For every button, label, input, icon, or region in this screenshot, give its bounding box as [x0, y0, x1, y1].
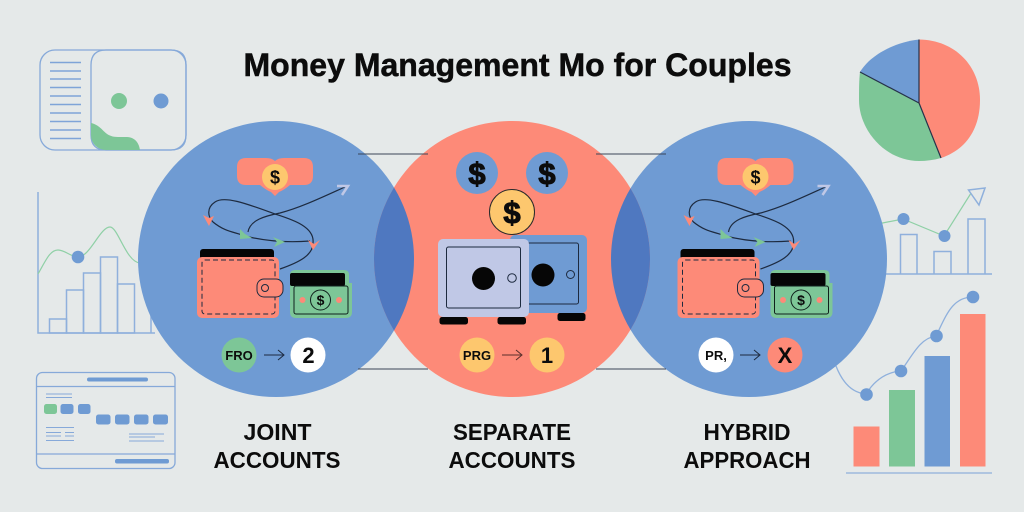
- flow: PR, to X: [698, 338, 802, 372]
- flow: FRO to 2: FRO: [225, 348, 253, 363]
- icon: wallet: [678, 249, 764, 318]
- label: hybrid approach: [684, 419, 810, 473]
- icon: back safe: [510, 235, 587, 321]
- flow: FRO to 2: 2: [302, 343, 315, 368]
- flow: PRG to 1: PRG: [463, 348, 491, 363]
- panel: joint accounts illustration: [197, 158, 352, 372]
- flow: PR, to X: PR,: [705, 348, 727, 363]
- panel: dashboard wireframe: [36, 372, 175, 468]
- connector lines: [358, 154, 666, 369]
- panel: document card illustration: [40, 50, 186, 150]
- icon: gold coin: $: [503, 195, 521, 230]
- label: joint accounts: [214, 419, 340, 473]
- panel: separate accounts illustration: [438, 152, 587, 372]
- circle: joint accounts: [138, 121, 414, 397]
- icon: cash: [290, 270, 352, 318]
- icon: looping arrows: [684, 186, 828, 269]
- icon: blue coin left: [456, 152, 498, 194]
- circle: hybrid approach: [611, 121, 887, 397]
- icon: heart badge with coin: $: [270, 168, 280, 188]
- label: separate accounts: ACCOUNTS: [448, 447, 576, 473]
- chart: right upper line and bars: [880, 188, 992, 274]
- label: separate accounts: SEPARATE: [453, 419, 571, 445]
- icon: front safe: [438, 239, 529, 324]
- icon: wallet: [197, 249, 283, 318]
- chart: left bar and line chart: [38, 192, 155, 333]
- flow: PRG to 1: 1: [541, 343, 553, 368]
- icon: looping arrows: [203, 186, 348, 269]
- flow: PRG to 1: [460, 338, 564, 372]
- label: hybrid approach: HYBRID: [704, 419, 790, 445]
- chart: right lower bar chart with trend line: [836, 291, 992, 473]
- label: joint accounts: ACCOUNTS: [214, 447, 340, 473]
- icon: heart badge with coin: $: [750, 168, 761, 188]
- icon: blue coin right: $: [538, 156, 556, 191]
- panel: hybrid approach illustration: [678, 158, 832, 372]
- circle: separate accounts: [374, 121, 650, 397]
- flow: FRO to 2: [222, 338, 326, 372]
- flow: PR, to X: X: [778, 343, 793, 368]
- icon: cash: [770, 270, 832, 318]
- overlap: joint and separate: [374, 188, 414, 330]
- overlap: separate and hybrid: [611, 188, 650, 330]
- label: joint accounts: JOINT: [244, 419, 312, 445]
- icon: gold coin: [490, 190, 534, 234]
- label: separate accounts: [448, 419, 576, 473]
- icon: heart badge with coin: [718, 158, 794, 196]
- icon: blue coin left: $: [468, 156, 486, 191]
- pie chart: [859, 40, 980, 161]
- title: Money Management Mo for Couples: [244, 47, 792, 83]
- icon: cash: $: [797, 292, 805, 308]
- icon: blue coin right: [526, 152, 568, 194]
- icon: cash: $: [317, 292, 325, 308]
- label: hybrid approach: APPROACH: [684, 447, 810, 473]
- icon: heart badge with coin: [237, 158, 313, 196]
